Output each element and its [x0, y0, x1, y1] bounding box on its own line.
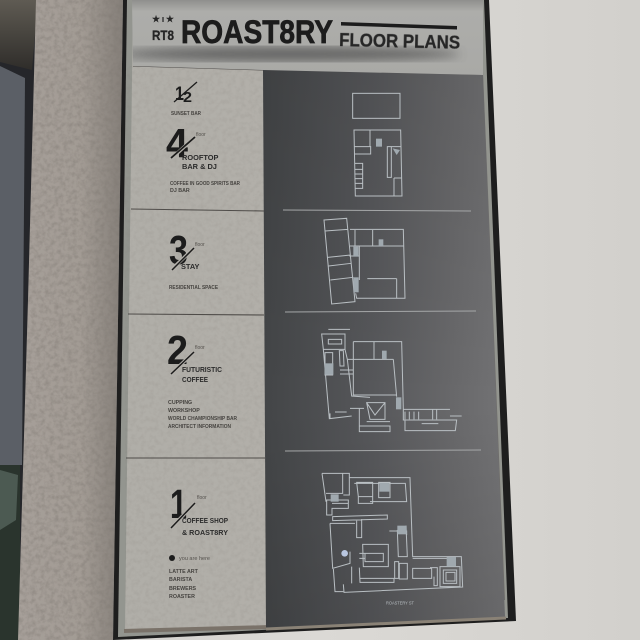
logo: RT8 with stars	[152, 14, 175, 43]
word: floor: floor	[195, 345, 205, 351]
heading: rooftop: ROOFTOP	[182, 153, 218, 162]
heading: coffee shop and roast8ry: COFFEE SHOP	[182, 516, 228, 525]
background: glass and doorway at far left	[0, 0, 45, 640]
logo: RT8 with stars: RT8	[152, 27, 174, 43]
floor 2 label: ARCHITECT INFORMATION	[168, 424, 231, 430]
slash	[171, 248, 194, 270]
floor 1 label: BREWERS	[169, 586, 197, 592]
heading: stay: STAY	[181, 262, 200, 271]
floor 3 label	[169, 227, 218, 291]
icon: you are here dot	[169, 555, 175, 561]
panel: floor list	[124, 0, 505, 631]
word: floor: floor	[196, 132, 206, 138]
word: floor: floor	[195, 242, 205, 248]
number: 1: 1	[170, 481, 187, 527]
slash	[172, 137, 195, 158]
floor plan: floor 1: ROASTERY ST	[386, 601, 414, 606]
floor 2 label: WORKSHOP	[168, 408, 200, 414]
list: second floor features: CUPPING	[168, 400, 192, 406]
title rule	[341, 22, 457, 30]
label: you are here: you are here	[179, 556, 210, 562]
slash	[171, 503, 195, 528]
floor 4 label	[166, 120, 240, 194]
floor plan: floor 1	[322, 473, 463, 606]
floor 2 label: WORLD CHAMPIONSHIP BAR	[168, 416, 237, 422]
number: one half: 1	[175, 84, 184, 105]
list: rooftop features: COFFEE IN GOOD SPIRITS BAR	[170, 181, 240, 187]
list: first floor features: LATTE ART	[169, 569, 199, 575]
floor plan: floor 3	[324, 218, 405, 304]
title: ROAST8RY: ROAST8RY	[181, 14, 333, 50]
number: 2: 2	[167, 327, 188, 373]
subtitle: floor plans: FLOOR PLANS	[339, 30, 460, 53]
label: residential space: RESIDENTIAL SPACE	[169, 285, 218, 291]
sign frame	[113, 0, 516, 640]
floor plan: rooftop and floor 4	[353, 93, 402, 196]
floor 1 label: & ROAST8RY	[182, 528, 228, 537]
number: 3: 3	[169, 227, 188, 273]
number: one half	[175, 84, 192, 106]
floor 2 label: COFFEE	[182, 375, 208, 384]
floor 4 label: DJ BAR	[170, 188, 190, 194]
floor 1/2 label	[171, 82, 201, 117]
number: 4: 4	[166, 120, 188, 166]
concrete column	[16, 0, 126, 640]
slash	[174, 82, 197, 102]
label: sunset bar: SUNSET BAR	[171, 111, 201, 117]
panel: dark floor plan board	[263, 70, 506, 629]
floor 4 label: BAR & DJ	[182, 162, 217, 171]
number: one half: 2	[183, 89, 192, 106]
floor 1 label	[169, 481, 228, 600]
heading: futuristic coffee: FUTURISTIC	[182, 365, 223, 374]
floor 1 label: BARISTA	[169, 577, 192, 583]
slash	[171, 352, 194, 374]
floor 1 label: ROASTER	[169, 594, 195, 600]
word: floor: floor	[197, 495, 207, 501]
logo: RT8 with stars: ★ı★	[152, 14, 175, 24]
panel: header band	[120, 0, 483, 75]
floor 2 label	[167, 327, 237, 430]
floor plan: floor 2	[322, 329, 462, 432]
